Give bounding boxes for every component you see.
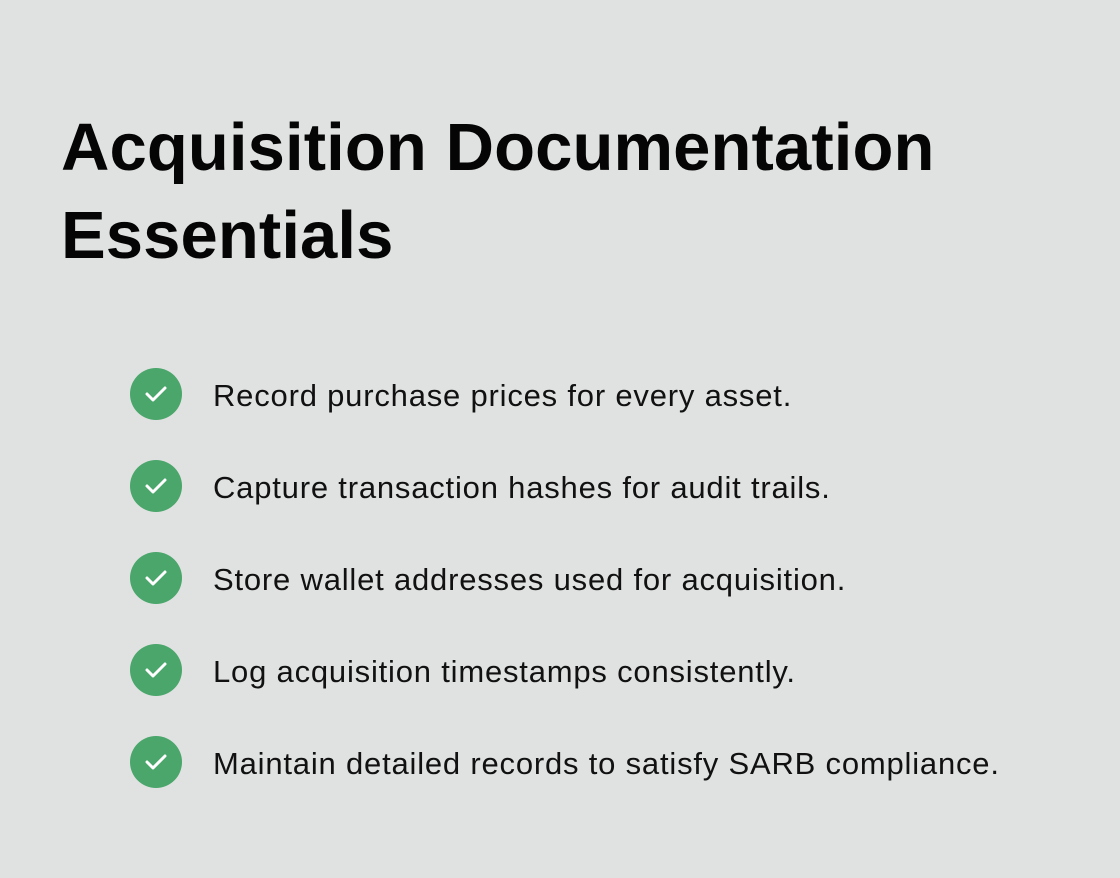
title: Essentials	[61, 198, 393, 273]
item 5	[130, 736, 1000, 788]
text: Log acquisition timestamps consistently.	[213, 654, 796, 689]
item 1	[130, 368, 792, 420]
item 4	[130, 644, 796, 696]
text: Store wallet addresses used for acquisition.	[213, 562, 846, 597]
item 3	[130, 552, 846, 604]
icon: check	[130, 460, 182, 512]
text: Maintain detailed records to satisfy SARB compliance.	[213, 746, 1000, 781]
icon: check	[130, 736, 182, 788]
icon: check	[130, 368, 182, 420]
icon: check	[130, 552, 182, 604]
title	[61, 110, 934, 273]
icon: check	[130, 644, 182, 696]
title: Acquisition Documentation	[61, 110, 934, 185]
item 2	[130, 460, 831, 512]
text: Record purchase prices for every asset.	[213, 378, 792, 413]
text: Capture transaction hashes for audit trails.	[213, 470, 831, 505]
